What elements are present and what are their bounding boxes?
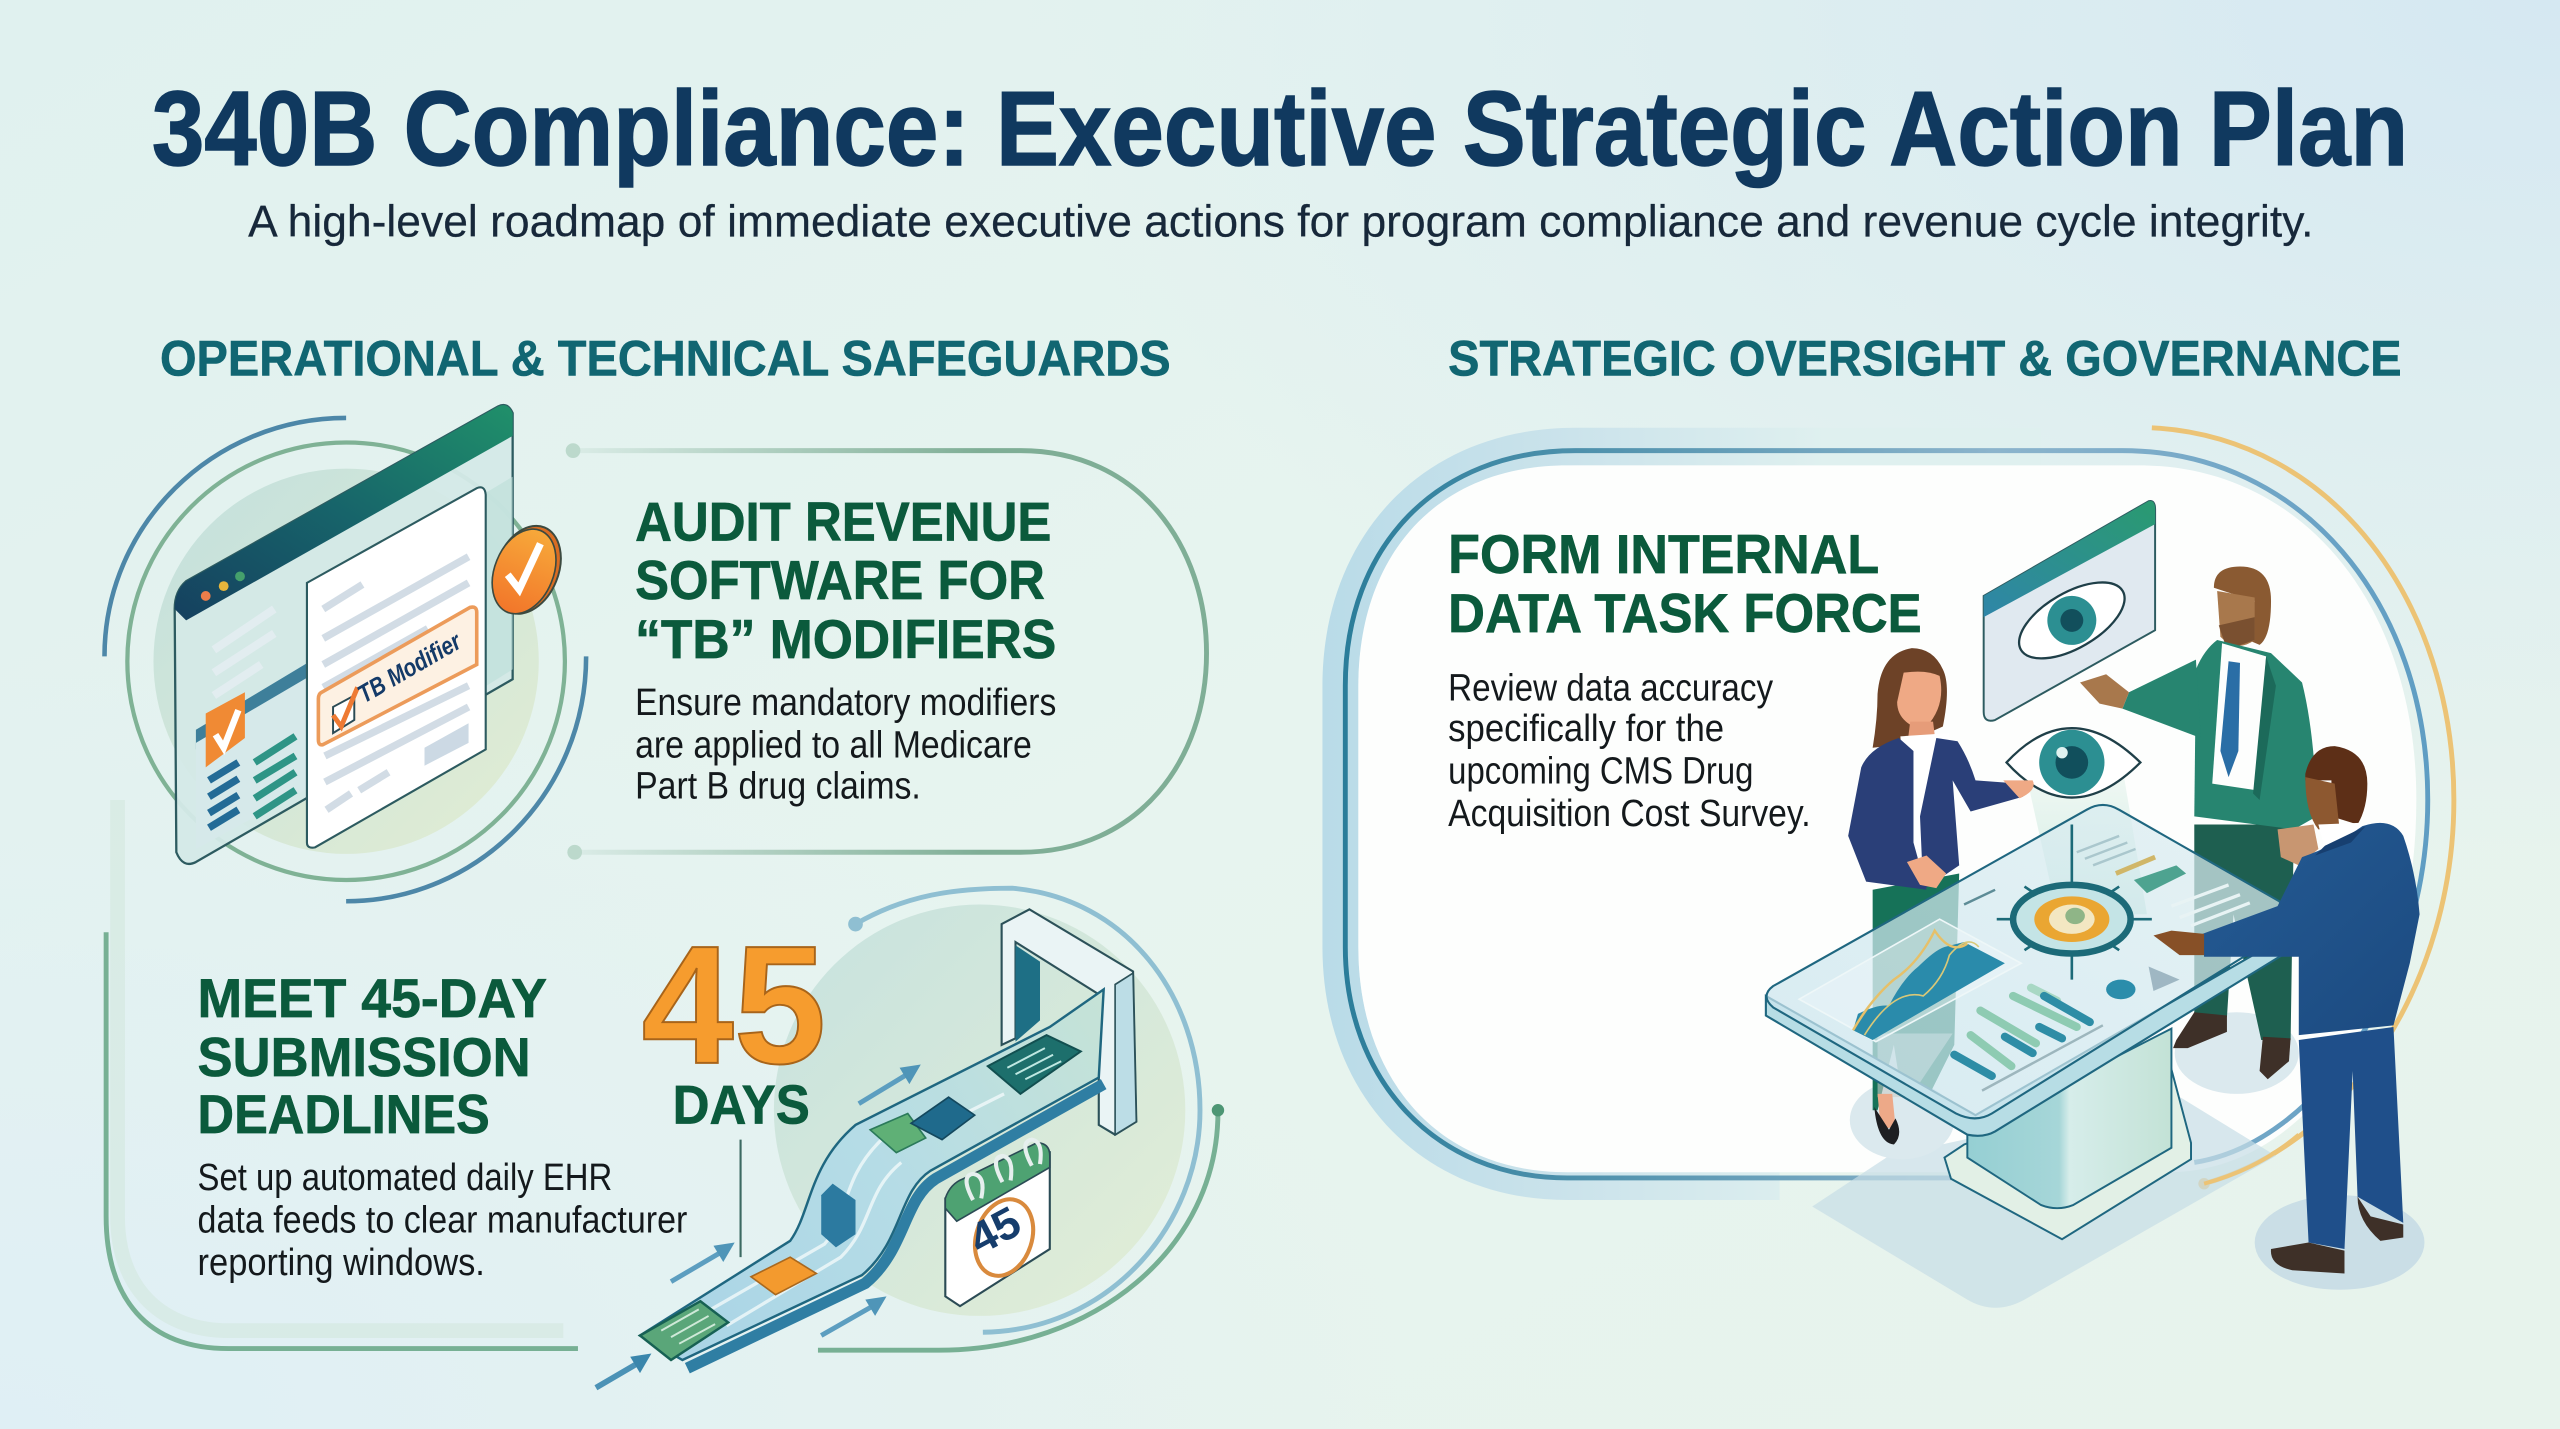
- body text: modifiers: [635, 681, 1056, 807]
- heading: audit revenue software: AUDIT REVENUE: [635, 490, 1051, 552]
- body text: review data accuracy: [1448, 666, 1811, 835]
- icon: software window with TB modifier: [104, 405, 586, 901]
- area chart on table: [1799, 919, 2021, 1042]
- small data elements on table: [1964, 836, 2250, 999]
- gate: [1002, 909, 1136, 1135]
- accent curve: [2152, 428, 2454, 1184]
- body text: review data accuracy: upcoming CMS Drug: [1448, 750, 1753, 793]
- floor circles: [1850, 1081, 1954, 1159]
- heading: task force: DATA TASK FORCE: [1448, 582, 1922, 644]
- icon: data conveyor with gate and calendar: [596, 888, 1200, 1388]
- panel: meet 45-day deadlines: [106, 800, 1224, 1350]
- person: woman: [1848, 648, 2034, 1144]
- body text: data feeds: [198, 1156, 688, 1284]
- document page: [307, 487, 486, 848]
- TB modifier badge: TB Modifier: [353, 627, 467, 709]
- heading: meet 45-day: [198, 967, 547, 1145]
- accent curve: front segment: [2204, 1135, 2299, 1184]
- data tiles on belt: [640, 1301, 728, 1360]
- body text: modifiers: Ensure mandatory modifiers: [635, 681, 1056, 724]
- person: man in blue suit: [2153, 746, 2420, 1273]
- orange check medal: [480, 516, 573, 624]
- big 45 number: 45: [642, 911, 826, 1099]
- icon: eye: [2007, 728, 2140, 798]
- body text: modifiers: are applied to all Medicare: [635, 724, 1032, 767]
- calendar: 45: [961, 1197, 1029, 1264]
- body text: review data accuracy: Review data accuracy: [1448, 666, 1774, 709]
- heading: audit revenue software: [635, 490, 1056, 670]
- heading: task force: FORM INTERNAL: [1448, 523, 1879, 585]
- days label: DAYS: [673, 1073, 810, 1135]
- panel outline: [575, 451, 1207, 852]
- section heading: operational and technical safeguards: OPERATIONAL & TECHNICAL SAFEGUARDS: [160, 331, 1171, 387]
- pedestal: [1944, 1069, 2191, 1239]
- body text: data feeds: data feeds to clear manufacturer: [198, 1199, 688, 1242]
- panel outline: [118, 800, 563, 1331]
- heading: meet 45-day: DEADLINES: [198, 1083, 490, 1145]
- flow arrows: [596, 1064, 921, 1388]
- browser title bar: [175, 405, 513, 620]
- conveyor belt: [687, 1084, 1104, 1368]
- browser window: [175, 405, 513, 864]
- heading: audit revenue software: “TB” MODIFIERS: [635, 608, 1056, 670]
- illustration: team around glass table: [1766, 501, 2424, 1308]
- heading: meet 45-day: MEET 45-DAY: [198, 967, 547, 1029]
- icon: eye screen: [1984, 501, 2155, 721]
- panel: audit revenue software: [566, 443, 1207, 860]
- heading: task force: [1448, 523, 1922, 644]
- body text: review data accuracy: specifically for the: [1448, 707, 1724, 750]
- target on table: [1997, 824, 2152, 980]
- light beam: [2024, 767, 2147, 914]
- glass table: [1766, 805, 2296, 1136]
- heading: audit revenue software: SOFTWARE FOR: [635, 549, 1045, 611]
- floor shadow: [1812, 1094, 2276, 1308]
- callout line: [740, 1140, 742, 1257]
- body text: data feeds: reporting windows.: [198, 1241, 485, 1284]
- calendar: [945, 1140, 1050, 1306]
- bar chart on table: [1954, 988, 2090, 1076]
- orange check tile: [206, 692, 245, 767]
- outer band: [1322, 428, 2041, 1200]
- subtitle: A high-level roadmap of immediate executive actions for program compliance and revenue cycle integrity.: [248, 198, 2313, 247]
- outline: [1345, 451, 2428, 1178]
- white panel: [1358, 465, 2416, 1172]
- body text: review data accuracy: Acquisition Cost Survey.: [1448, 792, 1811, 835]
- panel: form internal data task force: [1322, 428, 2454, 1200]
- section heading: strategic oversight and governance: STRATEGIC OVERSIGHT & GOVERNANCE: [1448, 331, 2402, 387]
- body text: modifiers: Part B drug claims.: [635, 764, 921, 807]
- body text: data feeds: Set up automated daily EHR: [198, 1156, 612, 1199]
- person: man in green suit: [2080, 567, 2318, 1079]
- TB modifier badge: [318, 607, 477, 745]
- heading: meet 45-day: SUBMISSION: [198, 1026, 531, 1088]
